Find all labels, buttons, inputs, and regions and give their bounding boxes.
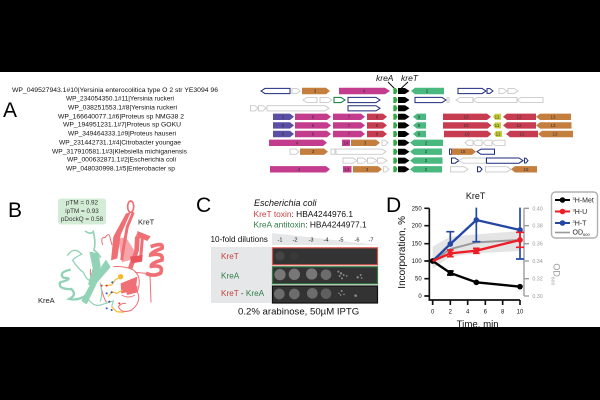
left axis: 10 [517, 310, 524, 316]
dilution wedge and labels: -3 [309, 238, 313, 244]
OD line [433, 240, 520, 261]
gene row 5 [273, 122, 572, 129]
strain label column: KreA [221, 272, 240, 280]
gene row 7: 14 [343, 140, 349, 145]
gene row 6: 6 [312, 132, 315, 136]
series: 3H-U [433, 232, 524, 261]
gene row 8: 2 [425, 149, 428, 154]
gene row 1 [261, 88, 518, 94]
gene row 3 [250, 105, 410, 111]
gene row 8 [290, 148, 494, 155]
right axis: 0.40 [532, 206, 543, 212]
left axis: Incorporation, % [397, 216, 408, 289]
strain label column: KreT - KreA [221, 289, 265, 298]
dilution wedge and labels [210, 233, 378, 245]
callout: confidence scores: pTM = 0.92 [66, 200, 99, 206]
dilution wedge and labels: 10-fold dilutions [210, 235, 268, 244]
right axis [524, 206, 561, 300]
gene row 7: 4 [296, 140, 299, 145]
left axis: 8 [501, 310, 505, 316]
gene row 6: 7 [348, 132, 351, 136]
caption: growth conditions: 0.2% arabinose, 50µM IPTG [238, 306, 359, 318]
gene row 6: 8 [376, 132, 379, 136]
gene row 10 [270, 166, 537, 172]
legend: 3 [572, 219, 576, 224]
gene row 4: 7 [348, 114, 351, 119]
dilution wedge and labels: -6 [355, 238, 359, 244]
text block: species accession list: WP_166640077.1#6|Proteus sp NMG38 2 [58, 114, 184, 120]
text block: species accession list: WP_234054350.1#11|Yersinia ruckeri [66, 96, 174, 102]
gene row 5: 13 [550, 123, 556, 128]
heading: panel letter C: C [196, 194, 211, 217]
labels: kreA and kreT with pointers [376, 73, 419, 88]
legend: H-U [575, 209, 587, 216]
text block: species accession list: WP_000632871.1#2|Escherichia coli [67, 156, 176, 164]
gene row 6 [273, 131, 573, 137]
text block: species accession list [12, 87, 218, 172]
gene row 5: 11 [495, 123, 500, 128]
gene row 6: 5 [282, 132, 285, 136]
gene row 5: 12 [516, 123, 522, 128]
plate rows with spots [272, 248, 378, 303]
gene row 6: 12 [519, 132, 525, 136]
gene row 8: 3 [312, 149, 315, 154]
text: KreT toxin accession: KreT toxin: HBA4244976.1 [254, 209, 353, 219]
heading: panel letter B: B [8, 199, 22, 222]
text block: species accession list: WP_317910581.1#3|Klebsiella michiganensis [52, 148, 187, 156]
OD band [433, 231, 520, 268]
dilution wedge and labels: -2 [293, 238, 297, 244]
gene row 5: 6 [312, 123, 315, 128]
heading: panel letter D: D [386, 194, 401, 217]
gene row 10: 2 [425, 167, 428, 172]
gene row 1: 4 [363, 88, 366, 94]
left axis: 200 [412, 224, 422, 230]
dilution wedge and labels: -1 [278, 238, 282, 244]
gene row 9 [343, 157, 528, 164]
left axis [397, 206, 524, 330]
callout: confidence scores: ipTM = 0.93 [65, 208, 99, 215]
gene row 5: 7 [348, 123, 351, 128]
gene row 5: 8 [376, 123, 379, 128]
legend: 3 [572, 196, 576, 201]
gene row 2 [303, 97, 543, 103]
gene row 4: 5 [282, 114, 285, 119]
gene row 5: 10 [463, 123, 469, 128]
gene row 4: 12 [516, 114, 522, 119]
panel: D incorporation chart [386, 191, 598, 330]
right axis: 0.38 [532, 224, 543, 230]
chart: KreT incorporation line chart: KreT [466, 191, 486, 201]
gene row 7 [269, 140, 505, 146]
gene row 4: 8 [376, 114, 379, 119]
heading: panel letter A: A [3, 99, 17, 122]
left axis: Time, min [457, 319, 499, 330]
panel: B protein structure [8, 198, 162, 312]
chart: KreT incorporation line chart [397, 191, 561, 330]
left axis: 2 [449, 310, 453, 316]
title: Escherichia coli: Escherichia coli [254, 198, 318, 208]
gene row 6: 11 [496, 132, 501, 136]
callout: confidence scores [58, 198, 106, 224]
gene row 4: 9 [418, 114, 421, 119]
text block: species accession list: WP_049527943.1#10|Yersinia enterocolitica type O 2 str YE3094 96 [12, 87, 218, 94]
panel: A gene neighbourhoods [3, 73, 573, 172]
gene row 10: 14 [344, 167, 350, 172]
callout: confidence scores: pDockQ = 0.58 [61, 216, 104, 223]
right axis: 600 [550, 277, 556, 285]
gene row 8: 15 [460, 149, 466, 154]
protein ribbon: KreT [90, 201, 162, 312]
label: KreA: KreA [38, 296, 55, 305]
left axis: 150 [412, 242, 422, 248]
gene row 7: 3 [364, 140, 367, 145]
left axis: 0 [418, 294, 422, 300]
gene row 4: 6 [312, 114, 315, 119]
legend: OD [572, 230, 583, 236]
right axis: 0.30 [532, 294, 543, 300]
legend: 600 [583, 232, 590, 237]
gene row 4: 10 [463, 114, 469, 119]
text block: species accession list: WP_194951231.1#7|Proteus sp GOKU [63, 122, 181, 128]
left axis: 6 [484, 310, 488, 316]
right axis: 0.36 [532, 242, 543, 248]
legend: H-Met [575, 198, 594, 204]
gene row 9: 2 [425, 158, 428, 163]
gene row 10: 3 [366, 167, 369, 172]
protein ribbon: KreA [60, 231, 113, 307]
right axis: 0.32 [532, 277, 543, 283]
text block: species accession list: WP_038251553.1#8|Yersinia ruckeri [68, 104, 177, 112]
labels: kreA and kreT with pointers: kreA [376, 73, 394, 83]
labels: kreA and kreT with pointers: kreT [401, 73, 419, 83]
gene row 5: 5 [282, 123, 285, 128]
left axis: 250 [412, 206, 422, 212]
legend: H-T [575, 220, 587, 228]
series: 3H-T [433, 208, 524, 261]
gene row 6: 13 [552, 132, 558, 136]
gene row 10: 15 [523, 167, 529, 172]
left axis: 0 [431, 310, 435, 316]
text block: species accession list: WP_048030998.1#5|Enterobacter sp [66, 166, 175, 172]
interface residues [101, 274, 124, 312]
gene row 7: 2 [425, 140, 428, 145]
legend [552, 192, 598, 238]
dilution wedge and labels: -7 [369, 238, 373, 244]
left axis: 50 [415, 277, 422, 283]
right axis: OD [551, 263, 561, 277]
gene row 6: 10 [464, 132, 470, 136]
strain label column: KreT [221, 252, 239, 261]
text: KreA antitoxin accession: KreA antitoxin: HBA4244977.1 [254, 220, 367, 230]
panel: C spot assay [196, 194, 378, 318]
gene row 4: 11 [495, 114, 500, 119]
label: KreT: KreT [138, 218, 155, 226]
left axis: 100 [412, 259, 422, 265]
text block: species accession list: WP_349464333.1#9|Proteus hauseri [68, 130, 176, 138]
left axis: 4 [466, 310, 470, 316]
gene row 10: 4 [298, 167, 301, 172]
legend: 3 [572, 208, 576, 212]
gene row 1: 2 [426, 88, 429, 94]
gene row 1: 3 [314, 88, 317, 94]
right axis: 0.34 [532, 259, 543, 265]
strain label column [211, 247, 272, 303]
series: 3H-Met [430, 258, 523, 289]
dilution wedge and labels: -4 [324, 238, 328, 244]
gene row 4 [273, 114, 571, 120]
gene row 4: 13 [550, 114, 556, 119]
text block: species accession list: WP_231442731.1#4|Citrobacter youngae [59, 140, 181, 146]
dilution wedge and labels: -5 [339, 238, 343, 244]
gene row 5: 9 [418, 123, 421, 128]
gene row 6: 9 [418, 132, 421, 136]
